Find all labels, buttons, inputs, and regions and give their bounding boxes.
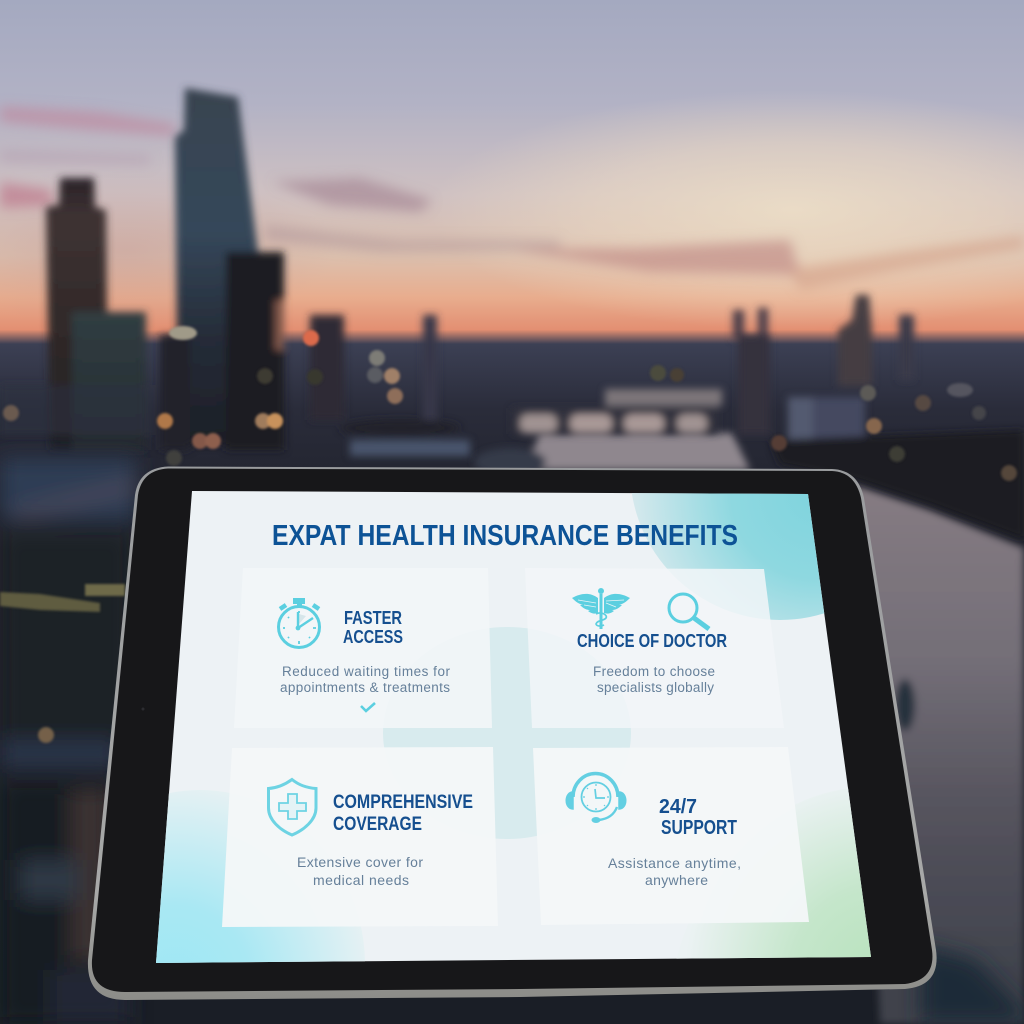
description: 24/7 support: Assistance anytime, — [608, 855, 741, 871]
sky clouds — [0, 106, 1024, 290]
heading: faster access: ACCESS — [343, 627, 403, 647]
bridge — [512, 389, 722, 434]
heading: comprehensive coverage: COMPREHENSIVE — [333, 792, 473, 813]
icon: caduceus — [572, 588, 630, 629]
heading: faster access: FASTER — [344, 608, 402, 628]
sky glow left — [0, 170, 420, 330]
heading: comprehensive coverage: COVERAGE — [333, 814, 422, 835]
sky glow — [300, 90, 1024, 330]
tablet rim — [88, 466, 937, 1000]
card: comprehensive coverage — [222, 747, 498, 927]
description: comprehensive coverage: Extensive cover for — [297, 854, 423, 870]
description: 24/7 support: anywhere — [645, 872, 708, 888]
city lights — [0, 326, 1017, 743]
heading: choice of doctor: CHOICE OF DOCTOR — [577, 631, 727, 651]
title: EXPAT HEALTH INSURANCE BENEFITS — [272, 520, 738, 552]
card: choice of doctor — [525, 568, 784, 728]
skyline buildings — [0, 88, 1024, 540]
description: choice of doctor: specialists globally — [597, 680, 714, 695]
icon: headset with clock — [566, 774, 626, 823]
screen — [156, 491, 871, 963]
description: comprehensive coverage: medical needs — [313, 872, 409, 888]
tablet — [88, 466, 937, 1000]
tablet bezel — [92, 468, 932, 992]
icon: magnifier — [669, 594, 709, 629]
icon: check mark — [361, 703, 375, 711]
card: 24/7 support — [533, 747, 809, 925]
heading: 24/7 support: 24/7 — [659, 796, 697, 818]
card: faster access — [234, 568, 492, 728]
description: faster access: appointments & treatments — [280, 680, 450, 695]
description: faster access: Reduced waiting times for — [282, 664, 450, 679]
lower left city blocks — [0, 458, 136, 1024]
heading: 24/7 support: SUPPORT — [661, 817, 737, 839]
camera dot — [142, 708, 144, 710]
river dark corner — [920, 945, 1024, 1024]
icon: stopwatch — [278, 598, 320, 648]
description: choice of doctor: Freedom to choose — [593, 664, 715, 679]
icon: shield with cross — [268, 780, 316, 835]
river — [474, 433, 1024, 1024]
